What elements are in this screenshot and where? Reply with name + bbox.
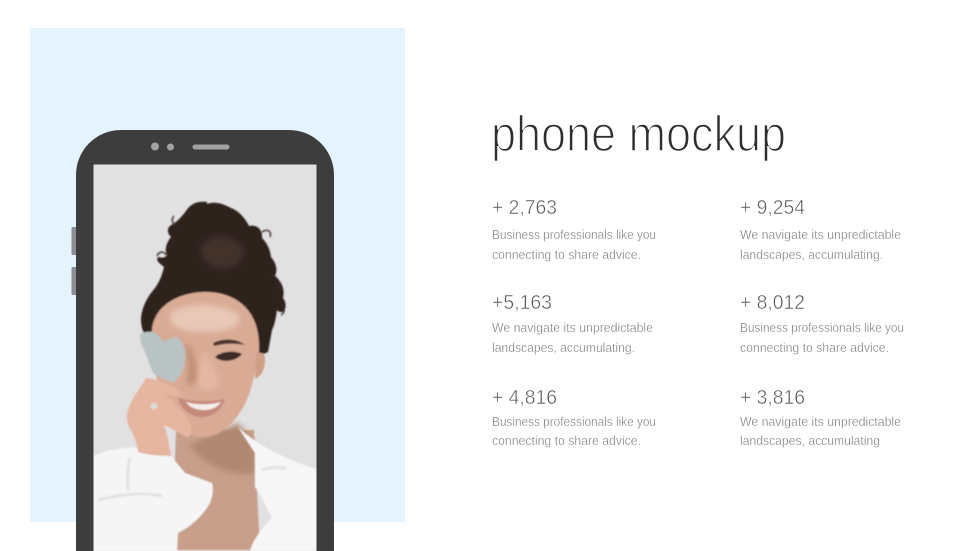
stat 5: 4,816: + 4,816 [492, 387, 557, 409]
smile [178, 398, 225, 417]
icon: phone camera and speaker [151, 142, 230, 150]
stat 1: 2,763: connecting to share advice. [492, 247, 641, 262]
stat 6: 3,816: + 3,816 [740, 387, 805, 409]
white shirt right collar [238, 427, 317, 551]
title: phone mockup [491, 106, 786, 162]
stray curls [157, 216, 284, 315]
stat 3: 5,163: We navigate its unpredictable [492, 320, 653, 335]
photo: smiling woman on phone screen [93, 164, 317, 551]
stat 3: 5,163: landscapes, accumulating. [492, 340, 635, 355]
forehead highlight [170, 305, 239, 332]
stat 1: 2,763 [492, 197, 656, 262]
panel: light blue backdrop [30, 28, 405, 522]
stat 2: 9,254: landscapes, accumulating. [740, 247, 883, 262]
stat 6: 3,816: landscapes, accumulating [740, 433, 880, 448]
white shirt left sleeve [93, 448, 213, 551]
hair bun and curls [141, 202, 286, 360]
phone body [76, 130, 334, 551]
neck and chest [172, 430, 260, 550]
stat 4: 8,012: connecting to share advice. [740, 340, 889, 355]
face [152, 292, 259, 437]
stat 4: 8,012: + 8,012 [740, 292, 805, 314]
stat 5: 4,816 [492, 387, 656, 448]
nose highlight [198, 356, 218, 389]
stat 4: 8,012 [740, 292, 904, 355]
hair curl highlights [200, 237, 243, 269]
stat 5: 4,816: connecting to share advice. [492, 433, 641, 448]
stat 2: 9,254 [740, 197, 901, 262]
stat 6: 3,816: We navigate its unpredictable [740, 414, 901, 429]
stat 1: 2,763: Business professionals like you [492, 227, 656, 242]
stat 2: 9,254: We navigate its unpredictable [740, 227, 901, 242]
eye and brow [213, 339, 245, 346]
stat 3: 5,163 [492, 292, 653, 355]
jade gua sha stone [140, 332, 185, 383]
icon: phone side buttons [72, 227, 78, 295]
ring [150, 402, 158, 410]
stat 4: 8,012: Business professionals like you [740, 320, 904, 335]
stat 1: 2,763: + 2,763 [492, 197, 557, 219]
stat 2: 9,254: + 9,254 [740, 197, 805, 219]
shirt fold shadows [98, 458, 286, 500]
right ear [255, 353, 265, 379]
stat 5: 4,816: Business professionals like you [492, 414, 656, 429]
phone mockup [72, 130, 334, 551]
stat 6: 3,816 [740, 387, 901, 448]
shadow beside stone [184, 344, 197, 386]
stat 3: 5,163: +5,163 [492, 292, 552, 314]
hand holding stone [127, 378, 191, 456]
